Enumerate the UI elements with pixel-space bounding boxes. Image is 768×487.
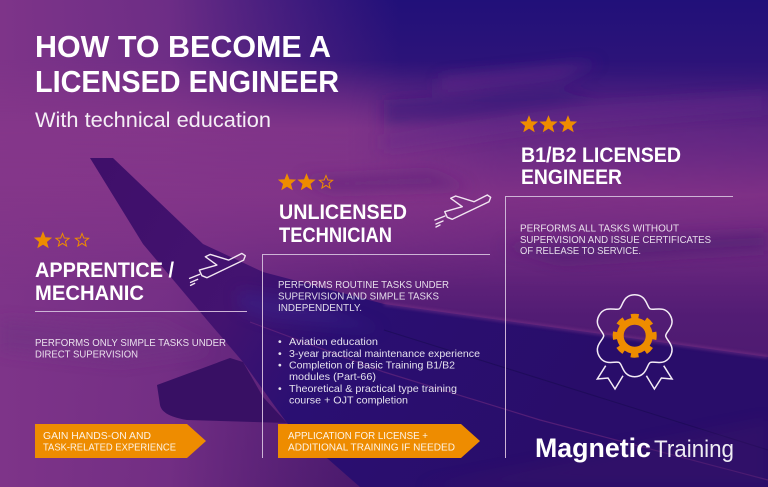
icon: plane xyxy=(190,253,245,285)
requirements list: • xyxy=(278,348,282,360)
icon: plane xyxy=(435,195,491,227)
column: b1/b2 licensed engineer xyxy=(506,116,734,463)
icon: two of three stars xyxy=(279,174,333,189)
heading: unlicensed technician xyxy=(279,201,407,247)
requirements list: • xyxy=(278,383,282,395)
logo: Magnetic Training: Training xyxy=(654,436,734,463)
heading: apprentice / mechanic: MECHANIC xyxy=(35,282,144,305)
arrow: gain experience: TASK-RELATED EXPERIENCE xyxy=(43,442,176,454)
requirements list: Theoretical & practical type training xyxy=(289,383,457,395)
body text xyxy=(35,337,226,360)
heading: unlicensed technician: TECHNICIAN xyxy=(279,224,392,247)
icon: certificate badge with gear xyxy=(597,295,672,389)
logo: Magnetic Training xyxy=(535,433,734,463)
requirements list: Completion of Basic Training B1/B2 xyxy=(289,360,455,372)
requirements list: 3-year practical maintenance experience xyxy=(289,348,480,360)
body text: DIRECT SUPERVISION xyxy=(35,348,138,360)
body text xyxy=(520,222,711,257)
icon: one of three stars xyxy=(35,232,89,247)
airplane wing xyxy=(90,158,768,487)
body text: OF RELEASE TO SERVICE. xyxy=(520,245,641,257)
requirements list: • xyxy=(278,360,282,372)
logo: Magnetic Training: Magnetic xyxy=(535,433,651,463)
arrow: application for license: APPLICATION FOR LICENSE + xyxy=(288,430,428,442)
heading: b1/b2 licensed engineer: B1/B2 LICENSED xyxy=(521,144,681,167)
frame line xyxy=(262,254,490,458)
arrow: application for license xyxy=(278,424,480,458)
body text: PERFORMS ONLY SIMPLE TASKS UNDER xyxy=(35,337,226,349)
subtitle: With technical education xyxy=(35,109,271,132)
requirements list: • xyxy=(278,336,282,348)
column: apprentice / mechanic xyxy=(35,232,245,458)
title xyxy=(35,30,339,99)
body text: SUPERVISION AND ISSUE CERTIFICATES xyxy=(520,234,711,246)
arrow: gain experience: GAIN HANDS-ON AND xyxy=(43,430,151,442)
body text: INDEPENDENTLY. xyxy=(278,302,362,314)
title: LICENSED ENGINEER xyxy=(35,65,339,99)
icon: three stars xyxy=(521,116,576,131)
requirements list: Aviation education xyxy=(289,336,378,348)
frame line xyxy=(506,196,733,458)
requirements list: modules (Part-66) xyxy=(289,371,376,383)
heading: apprentice / mechanic: APPRENTICE / xyxy=(35,259,174,282)
body text xyxy=(278,279,449,314)
body text: PERFORMS ALL TASKS WITHOUT xyxy=(520,222,680,234)
arrow: gain experience xyxy=(35,424,206,458)
body text: SUPERVISION AND SIMPLE TASKS xyxy=(278,290,439,302)
heading: b1/b2 licensed engineer: ENGINEER xyxy=(521,166,622,189)
requirements list xyxy=(278,336,480,406)
body text: PERFORMS ROUTINE TASKS UNDER xyxy=(278,279,449,291)
title: HOW TO BECOME A xyxy=(35,30,331,64)
heading: apprentice / mechanic xyxy=(35,259,174,305)
requirements list: course + OJT completion xyxy=(289,394,408,406)
column: unlicensed technician xyxy=(262,174,491,458)
heading: b1/b2 licensed engineer xyxy=(521,144,681,189)
arrow: application for license: ADDITIONAL TRAINING IF NEEDED xyxy=(288,442,455,454)
heading: unlicensed technician: UNLICENSED xyxy=(279,201,407,224)
